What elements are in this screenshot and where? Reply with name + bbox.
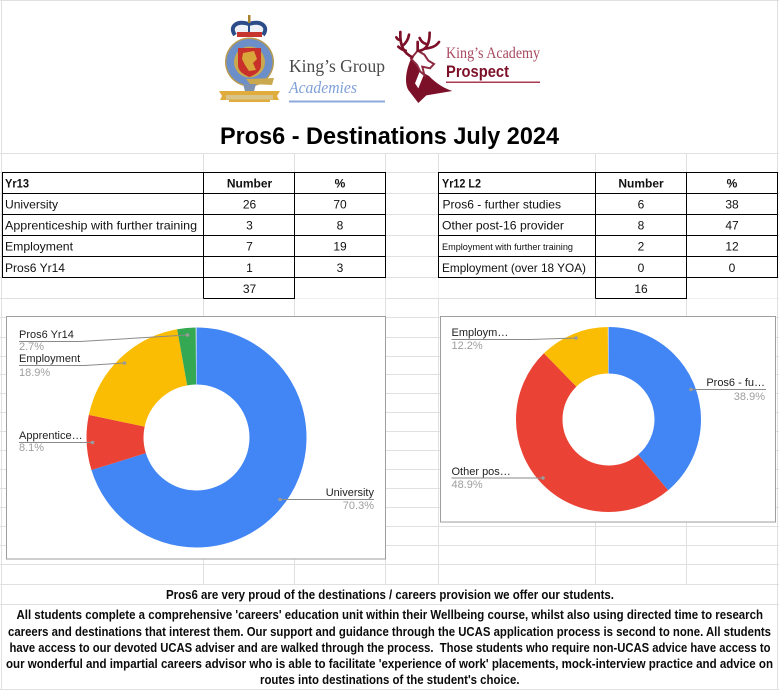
panel: Yr12 L2 donut chart: 48.9% [452,479,483,491]
table: Yr13 destinations: 3 [337,261,344,275]
logo: King's Academy Prospect stag: Prospect [446,62,509,81]
table: Yr13 destinations: 70 [333,198,347,212]
panel: Yr12 L2 donut chart: Pros6 - fu… [706,377,765,389]
table: Yr13 destinations: 3 [246,218,253,232]
logo text: King's Group Academies: Academies [288,78,357,97]
table: Yr12 L2 destinations: Other post-16 provider [442,218,564,232]
table: Yr12 L2 destinations: 8 [638,218,645,232]
panel: Yr13 donut chart: 70.3% [343,500,374,512]
panel: Yr13 donut chart: 2.7% [19,341,44,353]
table: Yr12 L2 destinations: % [727,176,738,190]
table: Yr13 destinations: University [5,198,58,212]
panel: Yr12 L2 donut chart: 38.9% [734,391,765,403]
table: Yr13 destinations: 8 [337,218,344,232]
table: Yr12 L2 destinations: Employment (over 18 YOA) [442,261,586,275]
table: Yr13 destinations [2,172,386,298]
table: Yr13 destinations: 7 [246,240,253,254]
table: Yr13 destinations: % [335,176,346,190]
panel: Yr13 donut chart: Employment [19,353,80,365]
panel: Yr12 L2 donut chart [440,316,776,522]
panel: Yr13 donut chart: University [326,487,374,499]
table: Yr13 destinations: Pros6 Yr14 [5,261,65,275]
table: Yr13 destinations: Number [227,176,272,190]
table: Yr12 L2 destinations: 0 [729,261,736,275]
table: Yr12 L2 destinations: Number [618,176,664,190]
table: Yr13 destinations: Employment [5,240,74,254]
panel: Yr13 donut chart: Pros6 Yr14 [19,329,74,341]
logo: King's Academy Prospect stag: King’s Academy [446,45,540,62]
table: Yr12 L2 destinations: 2 [638,240,645,254]
text block: careers provision [6,608,773,687]
panel: Yr13 donut chart: 8.1% [19,442,44,454]
panel: Yr12 L2 donut chart: 12.2% [452,340,483,352]
logo text: King's Group Academies: King’s Group [289,56,385,76]
logo: King's Group crest [219,15,280,102]
table: Yr12 L2 destinations: Pros6 - further studies [442,198,561,212]
table: Yr12 L2 destinations: 16 [634,282,648,296]
heading: proud statement: Pros6 are very proud of the destinations / careers provision we offer our students. [166,588,614,602]
logo text: King's Group Academies [288,56,385,102]
panel: Yr13 donut chart: Apprentice… [19,430,83,442]
title: Pros6 - Destinations July 2024 [220,123,560,150]
table: Yr13 destinations: 26 [243,198,256,212]
table: Yr12 L2 destinations: 38 [725,198,739,212]
logo: King's Academy Prospect stag [396,32,540,103]
panel: Yr13 donut chart [6,316,386,559]
text block: careers provision: routes into destinations of the student's choice. [260,673,520,687]
table: Yr13 destinations: 19 [333,240,347,254]
panel: Yr13 donut chart: 18.9% [19,367,50,379]
table: Yr12 L2 destinations [438,172,778,298]
table: Yr12 L2 destinations: 12 [725,240,739,254]
table: Yr12 L2 destinations: 47 [725,218,739,232]
table: Yr13 destinations: Apprenticeship with further training [5,218,197,232]
table: Yr12 L2 destinations: Employment with further training [442,242,573,253]
panel: Yr12 L2 donut chart: Employm… [452,327,508,339]
table: Yr12 L2 destinations: Yr12 L2 [442,176,481,190]
table: Yr13 destinations: Yr13 [5,176,29,190]
table: Yr12 L2 destinations: 0 [638,261,645,275]
panel: Yr12 L2 donut chart: Other pos… [452,466,511,478]
table: Yr12 L2 destinations: 6 [638,198,645,212]
table: Yr13 destinations: 37 [243,282,256,296]
table: Yr13 destinations: 1 [246,261,253,275]
